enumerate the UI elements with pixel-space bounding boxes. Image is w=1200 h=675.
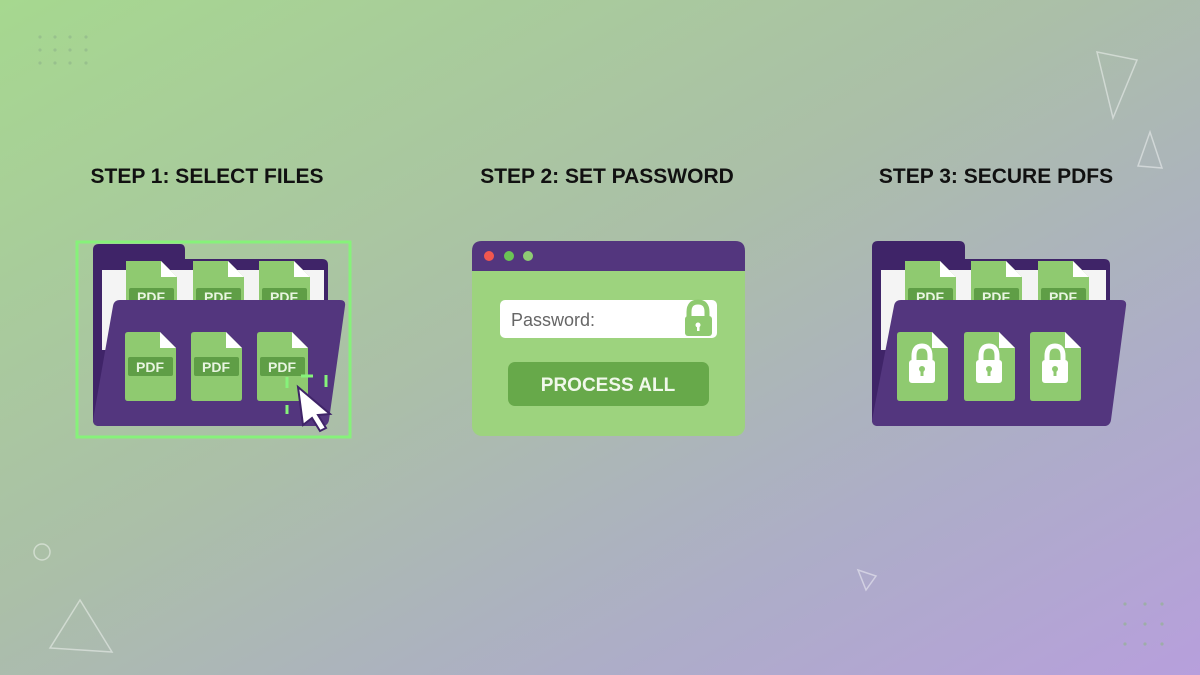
icon: folder with PDFs being selected: PDF bbox=[270, 289, 298, 305]
icon: padlock bbox=[685, 302, 712, 336]
icon: folder with PDFs being selected bbox=[77, 242, 350, 437]
icon: folder with PDFs being selected: PDF bbox=[202, 359, 230, 375]
heading: step 3: STEP 3: SECURE PDFS bbox=[879, 165, 1113, 188]
icon: mouse cursor bbox=[298, 387, 330, 431]
panel: password window: PROCESS ALL bbox=[541, 375, 676, 396]
button: process all bbox=[508, 362, 709, 406]
icon: folder with secured PDFs bbox=[872, 241, 1126, 426]
heading: step 2: STEP 2: SET PASSWORD bbox=[480, 165, 734, 188]
panel: password window: Password: bbox=[511, 310, 595, 330]
icon: folder with PDFs being selected: PDF bbox=[136, 359, 164, 375]
icon: folder with PDFs being selected: PDF bbox=[268, 359, 296, 375]
password field bbox=[500, 300, 717, 338]
icon: folder with PDFs being selected: PDF bbox=[204, 289, 232, 305]
icon: folder with secured PDFs: PDF bbox=[916, 289, 944, 305]
icon: folder with secured PDFs: PDF bbox=[982, 289, 1010, 305]
icon: folder with secured PDFs: PDF bbox=[1049, 289, 1077, 305]
panel: password window bbox=[472, 241, 745, 436]
heading: step 1: STEP 1: SELECT FILES bbox=[90, 165, 324, 188]
icon: folder with PDFs being selected: PDF bbox=[137, 289, 165, 305]
